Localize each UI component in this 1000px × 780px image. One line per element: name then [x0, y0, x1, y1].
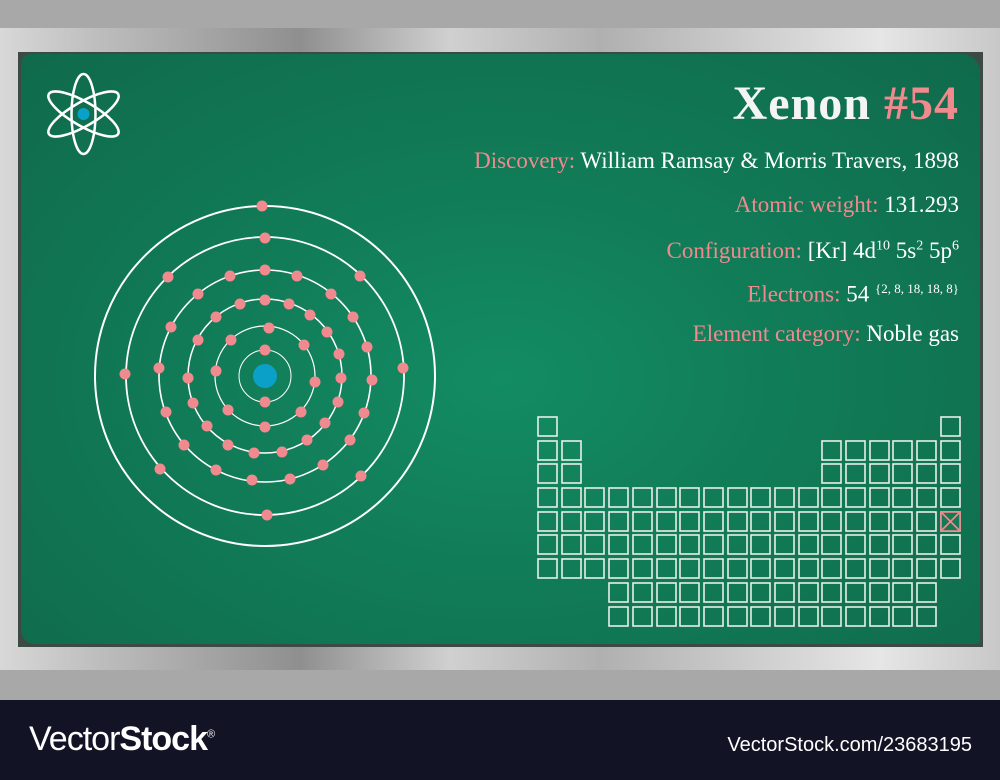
fact: atomic weight: Atomic weight: 131.293 [735, 192, 959, 217]
board [18, 52, 983, 647]
fact: configuration: Configuration: [Kr] 4d10 5s2 5p6 [667, 238, 959, 263]
footer bar [0, 700, 1000, 780]
atom model: Bohr diagram [94, 200, 436, 547]
fact: electrons: Electrons: 54 {2, 8, 18, 18, 8} [747, 281, 959, 307]
url text: VectorStock.com/23683195 [727, 734, 972, 756]
xenon cell highlight [941, 512, 960, 531]
logo: VectorStock: VectorStock® [29, 720, 214, 758]
fact: category: Element category: Noble gas [693, 321, 959, 346]
title: Xenon #54 [733, 77, 959, 130]
periodic table [537, 416, 961, 627]
text block: element facts [474, 148, 959, 346]
fact: discovery: Discovery: William Ramsay & Morris Travers, 1898 [474, 148, 959, 173]
icon: atom [47, 72, 120, 156]
